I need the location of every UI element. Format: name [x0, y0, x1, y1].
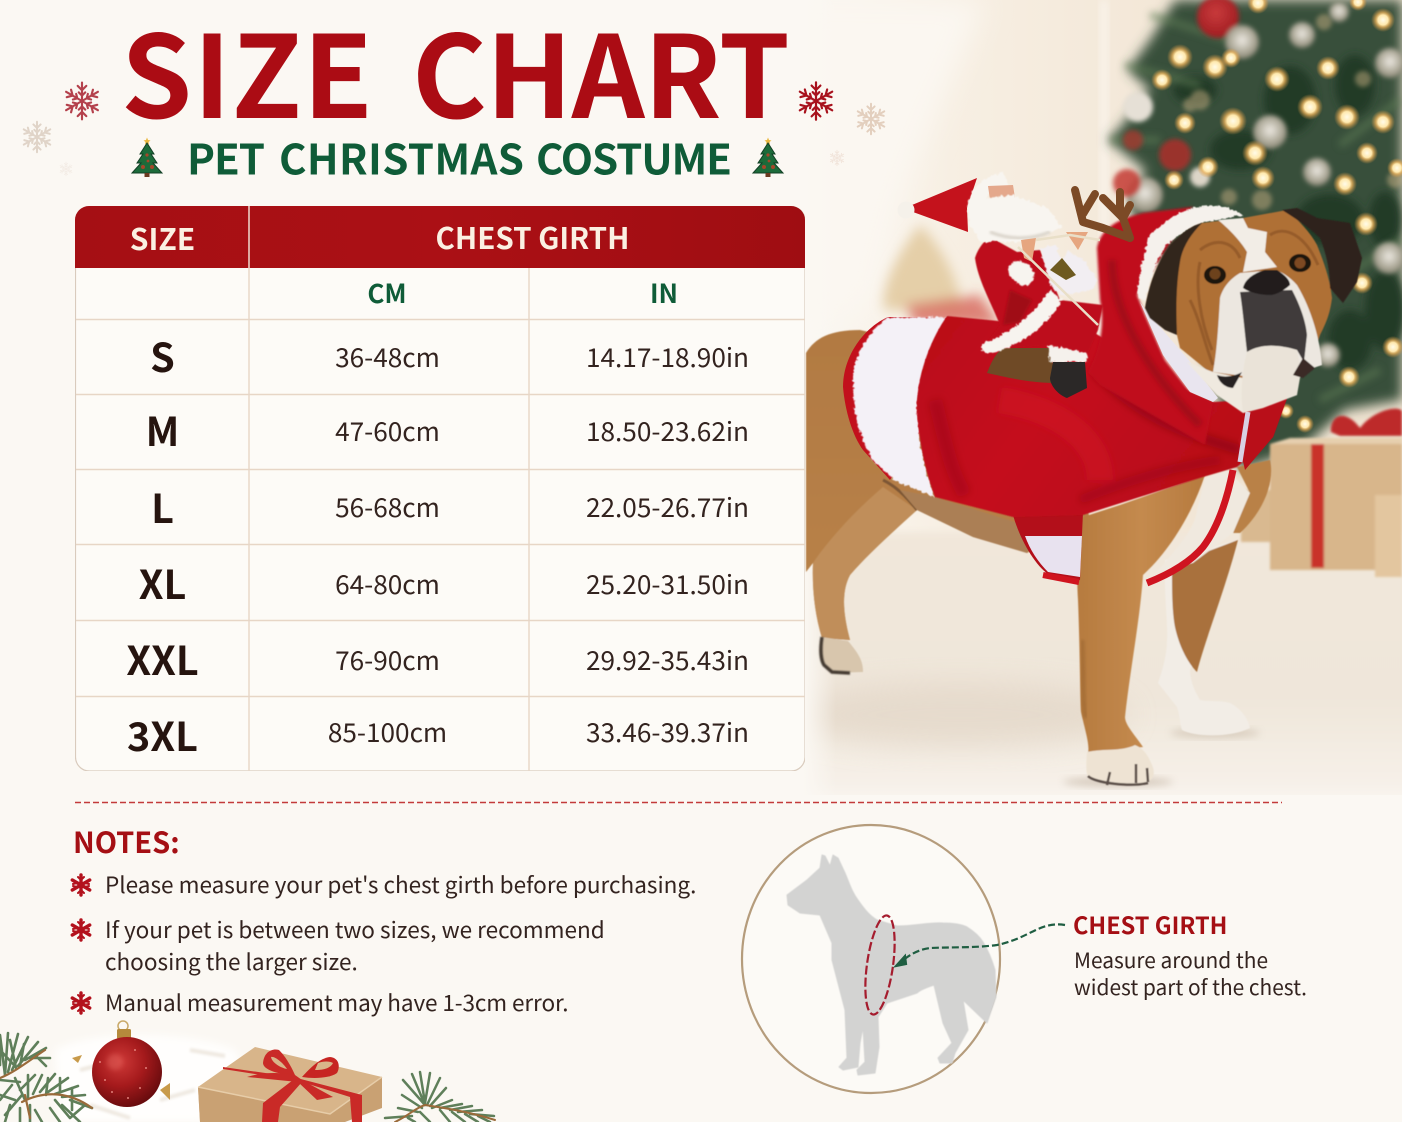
table header: size: SIZE: [130, 215, 195, 259]
body and hind leg: [806, 330, 1090, 640]
row L cm: 56-68cm: [335, 487, 440, 525]
row M label: M: [146, 400, 179, 458]
near paw: [1086, 745, 1154, 785]
row XL cm: 64-80cm: [335, 564, 440, 602]
antlers: [1075, 190, 1130, 238]
row L label: L: [151, 478, 174, 534]
santa toy: [898, 172, 1103, 398]
bokeh: [1183, 14, 1402, 210]
muzzle: [1213, 270, 1322, 376]
saddle opening on back: [987, 348, 1056, 383]
belly strap piece: [1013, 512, 1083, 580]
chest girth diagram: [740, 824, 1066, 1094]
gift box: [198, 1047, 382, 1122]
decorative snowflakes: [22, 81, 886, 176]
christmas tree: [1108, 0, 1402, 470]
subtitle: PET: [187, 126, 265, 188]
row S in: 14.17-18.90in: [586, 337, 749, 375]
row 3XL in: 33.46-39.37in: [586, 712, 749, 750]
head: [1145, 208, 1362, 413]
gift boxes behind dog: [1241, 409, 1402, 577]
row S cm: 36-48cm: [335, 337, 440, 375]
panel: size table: [75, 206, 805, 771]
chest girth label: CHEST GIRTH: [1073, 907, 1227, 941]
far front leg: [1158, 540, 1250, 735]
subtitle: COSTUME: [536, 126, 732, 188]
hood trim: [1137, 206, 1243, 302]
chest girth description: [1074, 945, 1307, 1002]
icon: note bullets: [70, 873, 92, 1015]
chin and neck: [1187, 362, 1297, 413]
note 2: If your pet is between two sizes, we recommend: [105, 913, 605, 945]
row 3XL label: 3XL: [127, 706, 198, 762]
red coat body: [917, 316, 1287, 517]
row XXL cm: 76-90cm: [335, 640, 440, 678]
chest measure ellipse: [860, 914, 900, 1016]
hood lining: [1140, 302, 1218, 402]
row XXL label: XXL: [126, 630, 199, 686]
note 2: choosing the larger size.: [105, 945, 358, 977]
table header: chest girth: CHEST GIRTH: [436, 216, 629, 258]
subtitle: [187, 126, 732, 188]
note 2: [105, 913, 605, 977]
row 3XL cm: 85-100cm: [328, 712, 447, 750]
dashed separator: [75, 802, 1282, 804]
notes heading: NOTES:: [73, 820, 180, 862]
column heading: cm: CM: [367, 274, 407, 310]
icon: christmas tree left: [131, 138, 163, 177]
title: [121, 0, 790, 151]
coat strap: [1147, 470, 1233, 583]
row L in: 22.05-26.77in: [586, 487, 749, 525]
note 1: Please measure your pet's chest girth before purchasing.: [105, 868, 696, 900]
eyes: [1204, 266, 1226, 284]
red trim and white fur band: [843, 317, 950, 480]
row XL label: XL: [139, 554, 186, 610]
column heading: in: IN: [650, 274, 678, 310]
chest girth description: Measure around the: [1074, 945, 1268, 975]
green arrow line: [896, 924, 1065, 966]
baubles: [1113, 0, 1402, 367]
bottom holiday decoration: [0, 1020, 496, 1122]
note 3: Manual measurement may have 1-3cm error.: [105, 986, 568, 1018]
icon: christmas tree right: [752, 138, 784, 177]
left pine branch: [0, 1033, 92, 1122]
near front leg and shoulder: [1077, 475, 1205, 753]
row S label: S: [150, 326, 175, 384]
dog silhouette: [787, 855, 996, 1075]
hood: [1088, 207, 1213, 445]
row XL in: 25.20-31.50in: [586, 564, 749, 602]
row M cm: 47-60cm: [335, 411, 440, 449]
row XXL in: 29.92-35.43in: [586, 640, 749, 678]
hind paw: [821, 637, 863, 673]
string lights: [1151, 0, 1402, 433]
red ornament: [72, 1021, 170, 1107]
chest girth description: widest part of the chest.: [1074, 972, 1307, 1002]
ear: [1282, 208, 1362, 303]
chest: [1233, 460, 1271, 533]
row M in: 18.50-23.62in: [586, 411, 749, 449]
subtitle: CHRISTMAS: [279, 126, 524, 188]
right pine branch: [385, 1072, 495, 1122]
